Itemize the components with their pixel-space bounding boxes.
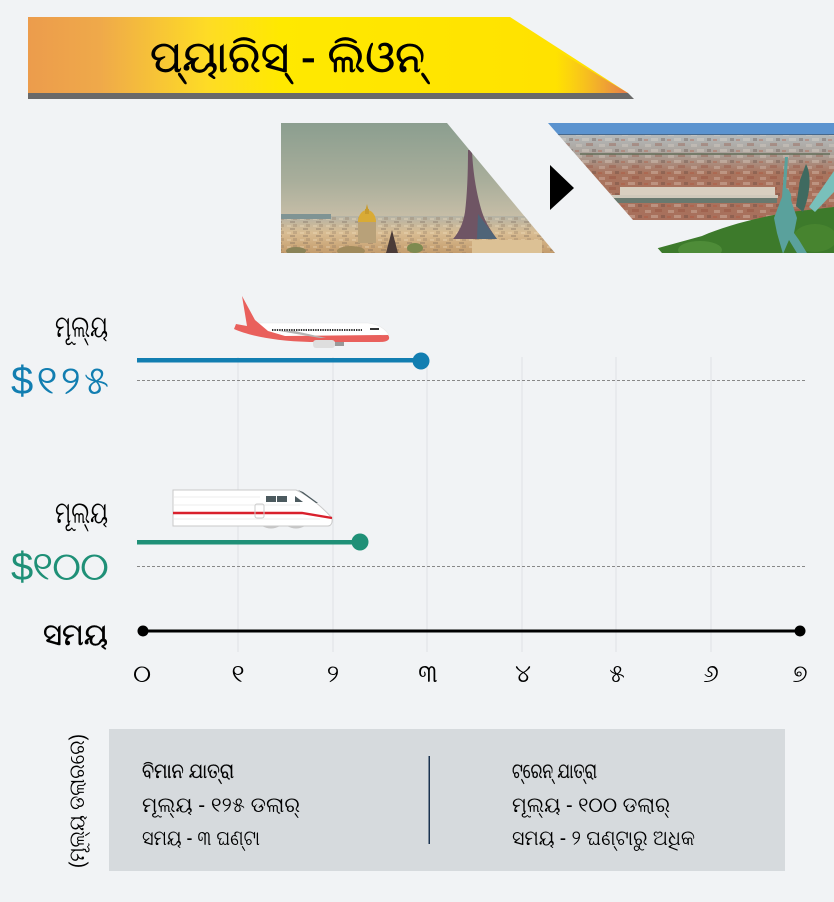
photo: Paris skyline — [281, 123, 561, 256]
rotated caption: (ମୂଲ୍ୟ ଡଲାରରେ) — [66, 734, 91, 868]
axis labels: ୧ — [231, 660, 245, 688]
train price label: ମୂଲ୍ୟ — [55, 495, 108, 532]
axis labels: ୦ — [133, 660, 151, 688]
train summary: ସମୟ - ୨ ଘଣ୍ଟାରୁ ଅଧିକ — [512, 827, 695, 851]
axis labels: ୨ — [327, 660, 339, 688]
train bar — [137, 534, 368, 550]
axis labels: ୩ — [418, 660, 438, 688]
airplane price label: ମୂଲ୍ୟ — [55, 309, 108, 346]
dashed lines — [137, 380, 806, 566]
photo: Lyon panorama — [548, 123, 834, 259]
time axis — [138, 626, 806, 636]
grid lines — [238, 357, 711, 652]
summary panel — [109, 729, 785, 871]
axis labels — [133, 660, 808, 688]
train summary — [512, 760, 695, 851]
title: ପ୍ୟାରିସ୍ - ଲିଓନ୍ — [150, 33, 430, 84]
time label: ସମୟ — [43, 617, 108, 652]
axis labels: ୪ — [515, 660, 531, 688]
train summary: ମୂଲ୍ୟ - ୧୦୦ ଡଲାର୍ — [512, 794, 670, 819]
airplane price value: $୧୨୫ — [11, 359, 109, 403]
airplane summary — [142, 760, 300, 851]
airplane bar — [137, 352, 430, 370]
airplane summary: ମୂଲ୍ୟ - ୧୨୫ ଡଲାର୍ — [142, 794, 300, 819]
train summary: ଟ୍ରେନ୍ ଯାତ୍ରା — [512, 760, 597, 784]
axis labels: ୭ — [792, 660, 808, 688]
arrow — [550, 165, 574, 210]
airplane summary: ସମୟ - ୩ ଘଣ୍ଟା — [142, 827, 260, 851]
airplane icon — [234, 296, 389, 348]
airplane summary: ବିମାନ ଯାତ୍ରା — [142, 760, 234, 784]
train price value: $୧୦୦ — [11, 545, 109, 589]
train icon — [173, 490, 332, 528]
axis labels: ୬ — [703, 660, 719, 688]
panel divider — [428, 756, 430, 844]
axis labels: ୫ — [609, 660, 625, 688]
title banner — [28, 17, 634, 99]
